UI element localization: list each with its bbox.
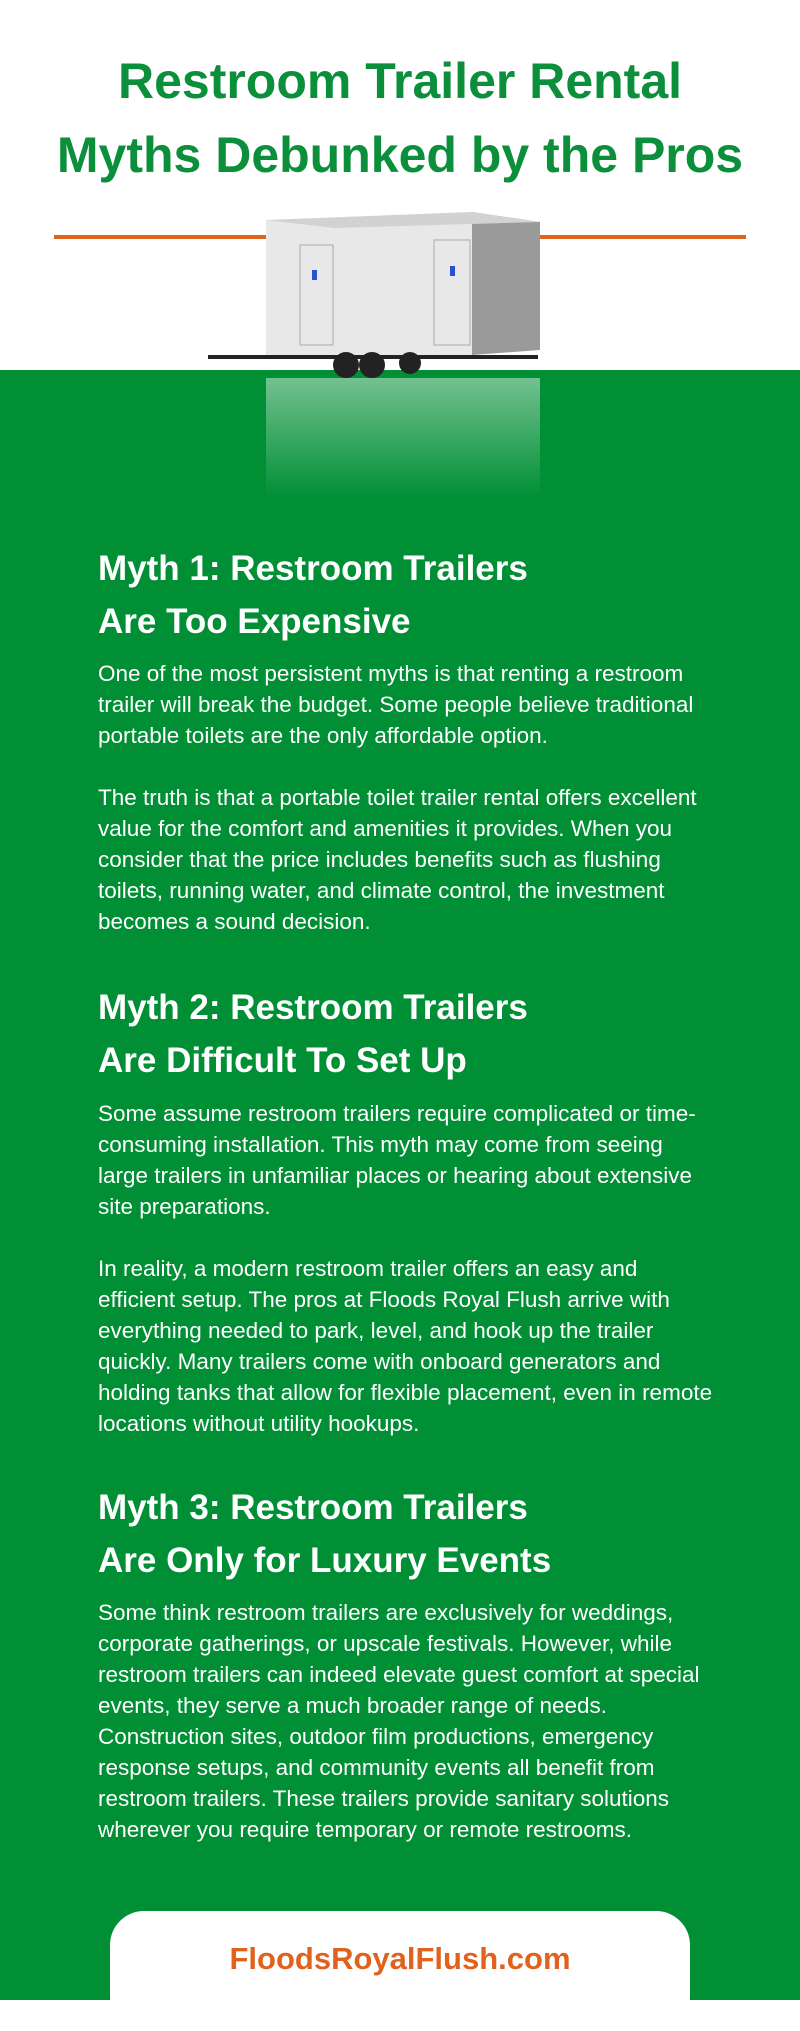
myth 2 heading <box>98 988 528 1080</box>
myth 1 text: trailer will break the budget. Some people believe traditional <box>98 692 693 717</box>
orange divider line <box>54 235 746 239</box>
myth 2 text: In reality, a modern restroom trailer offers an easy and <box>98 1256 637 1281</box>
myth 2 text: locations without utility hookups. <box>98 1411 419 1436</box>
myth 1 text: portable toilets are the only affordable option. <box>98 723 548 748</box>
myth 3 heading: Are Only for Luxury Events <box>98 1541 551 1580</box>
title: Myths Debunked by the Pros <box>57 127 743 183</box>
myth 1 heading <box>98 549 528 641</box>
myth 1 text: toilets, running water, and climate control, the investment <box>98 878 665 903</box>
myth 1 text: The truth is that a portable toilet trailer rental offers excellent <box>98 785 697 810</box>
myth 3 text: corporate gatherings, or upscale festivals. However, while <box>98 1631 672 1656</box>
myth 3 text: restroom trailers. These trailers provide sanitary solutions <box>98 1786 669 1811</box>
myth 2 text: site preparations. <box>98 1194 271 1219</box>
myth 3 heading <box>98 1488 551 1580</box>
title <box>57 53 743 183</box>
myth 1 text: value for the comfort and amenities it provides. When you <box>98 816 672 841</box>
myth 2 text: holding tanks that allow for flexible placement, even in remote <box>98 1380 712 1405</box>
myth 3 text: Some think restroom trailers are exclusively for weddings, <box>98 1600 673 1625</box>
myth 3 text <box>98 1600 700 1842</box>
myth 2 heading: Are Difficult To Set Up <box>98 1041 467 1080</box>
myth 1 text: One of the most persistent myths is that renting a restroom <box>98 661 683 686</box>
myth 3 text: events, they serve a much broader range of needs. <box>98 1693 607 1718</box>
myth 2 text: Some assume restroom trailers require complicated or time- <box>98 1101 696 1126</box>
myth 3 text: response setups, and community events all benefit from <box>98 1755 655 1780</box>
myth 2 text: consuming installation. This myth may come from seeing <box>98 1132 663 1157</box>
myth 2 text <box>98 1101 712 1436</box>
myth 1 text <box>98 661 697 934</box>
myth 3 text: Construction sites, outdoor film productions, emergency <box>98 1724 653 1749</box>
myth 1 heading: Myth 1: Restroom Trailers <box>98 549 528 588</box>
myth 2 text: large trailers in unfamiliar places or hearing about extensive <box>98 1163 692 1188</box>
footer website box <box>110 1911 690 2031</box>
myth 2 heading: Myth 2: Restroom Trailers <box>98 988 528 1027</box>
trailer illustration <box>208 212 540 489</box>
myth 3 text: wherever you require temporary or remote restrooms. <box>98 1817 632 1842</box>
myth 1 heading: Are Too Expensive <box>98 602 411 641</box>
title: Restroom Trailer Rental <box>118 53 682 109</box>
myth 3 heading: Myth 3: Restroom Trailers <box>98 1488 528 1527</box>
myth 3 text: restroom trailers can indeed elevate guest comfort at special <box>98 1662 700 1687</box>
myth 2 text: efficient setup. The pros at Floods Royal Flush arrive with <box>98 1287 670 1312</box>
footer website box: FloodsRoyalFlush.com <box>229 1941 571 1976</box>
myth 2 text: everything needed to park, level, and hook up the trailer <box>98 1318 653 1343</box>
myth 1 text: becomes a sound decision. <box>98 909 371 934</box>
myth 1 text: consider that the price includes benefits such as flushing <box>98 847 661 872</box>
myth 2 text: quickly. Many trailers come with onboard generators and <box>98 1349 660 1374</box>
